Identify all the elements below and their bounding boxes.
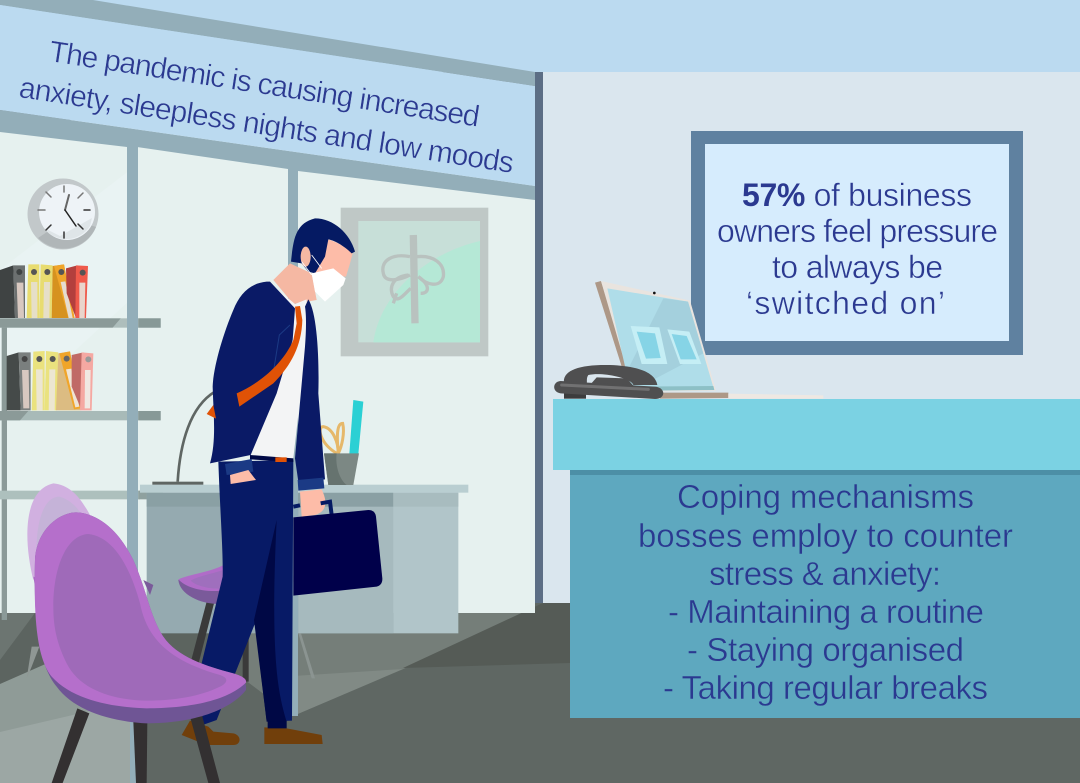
- banner text: The pandemic is causing increased: [47, 35, 482, 134]
- desk leg: [298, 633, 315, 678]
- ear: [301, 247, 311, 267]
- shelf middle: [0, 411, 161, 420]
- reception desk top: [553, 399, 1080, 470]
- desk in office: [140, 485, 468, 678]
- belt: [250, 455, 293, 462]
- wall poster with statistic: [691, 131, 1023, 355]
- seat shell: [35, 512, 246, 708]
- desk lamp: [152, 392, 215, 485]
- jacket: [210, 282, 295, 463]
- statistic text: [717, 177, 998, 321]
- coping mechanisms text: bosses employ to counter: [638, 517, 1013, 554]
- businessman: [182, 218, 382, 745]
- ghost chair: [27, 483, 153, 678]
- banner text: anxiety, sleepless nights and low moods: [17, 71, 516, 180]
- back wall: [535, 72, 1080, 603]
- shelves and binders: [0, 264, 163, 620]
- banner sign: [0, 5, 535, 186]
- shirt: [250, 282, 307, 458]
- ceiling: [0, 0, 1080, 72]
- floor: [0, 603, 1080, 783]
- window mullions: [127, 130, 298, 783]
- shelf post: [2, 327, 7, 620]
- shelf top: [0, 318, 161, 328]
- coping mechanisms text: - Staying organised: [687, 631, 964, 668]
- coping mechanisms text: - Taking regular breaks: [663, 669, 988, 706]
- pen pot with scissors and ruler: [320, 400, 363, 485]
- tie: [207, 306, 302, 419]
- framed x-ray picture: [341, 208, 488, 356]
- hair: [291, 218, 355, 273]
- wall clock: [28, 178, 98, 250]
- lower fascia: [0, 110, 535, 200]
- binders middle row: [7, 351, 93, 410]
- window light beam: [0, 170, 130, 420]
- dark corner column: [535, 72, 543, 603]
- statistic text: to always be: [772, 249, 943, 285]
- coping mechanisms text: stress & anxiety:: [709, 555, 941, 592]
- legs and shoes: [182, 460, 323, 745]
- binders top row: [0, 264, 88, 318]
- face: [315, 239, 353, 277]
- header band above window: [0, 0, 535, 86]
- desk top: [140, 485, 468, 493]
- laptop: [595, 281, 823, 399]
- seat underside: [35, 512, 246, 723]
- seat inner: [53, 534, 226, 701]
- desk body: [147, 493, 458, 633]
- cuffs and hand in pocket: [225, 459, 253, 475]
- neck: [273, 263, 317, 304]
- statistic text: owners feel pressure: [717, 213, 998, 249]
- hand and briefcase: [293, 489, 382, 596]
- front purple chair: [35, 512, 246, 783]
- chair legs: [52, 708, 220, 783]
- background chairs: [27, 483, 249, 682]
- head and torso: [207, 218, 355, 491]
- coping mechanisms text: [638, 478, 1013, 706]
- shelf bottom: [0, 491, 163, 499]
- reception desk front with coping text: [570, 470, 1080, 718]
- telephone: [554, 365, 663, 399]
- chair behind man: [178, 563, 249, 682]
- window panes: [0, 120, 535, 613]
- face mask: [302, 255, 346, 302]
- coping mechanisms text: - Maintaining a routine: [668, 593, 984, 630]
- statistic text: 57% of business: [742, 177, 972, 213]
- coping mechanisms text: Coping mechanisms: [677, 478, 974, 515]
- statistic text: ‘switched on’: [746, 285, 945, 321]
